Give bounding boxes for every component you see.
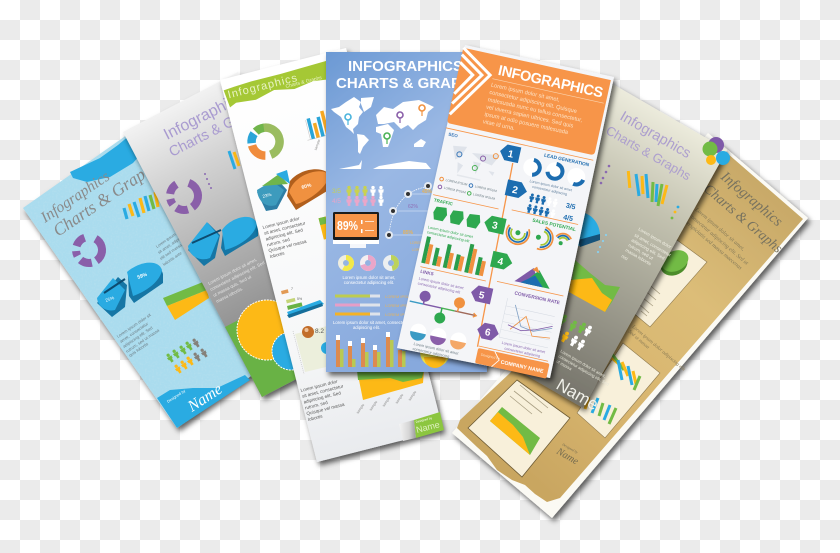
cyan text footer: adipiscing elit. Sed bbox=[122, 325, 154, 349]
bowl icons bbox=[409, 322, 468, 351]
area chart axis labels: sample bbox=[356, 403, 365, 415]
traffic text: consectetur adipiscing elit bbox=[426, 230, 471, 244]
cyan text block: sit amet, adipiscing bbox=[157, 232, 188, 255]
cyan text block bbox=[155, 226, 190, 267]
network arc: 62% bbox=[408, 204, 419, 210]
caption bbox=[342, 275, 396, 285]
step 5: 5 bbox=[478, 290, 486, 302]
area chart axis labels: sample bbox=[369, 400, 378, 412]
links text bbox=[417, 277, 465, 295]
cyan text footer: quis lobortis bbox=[128, 341, 149, 358]
company footer bbox=[475, 348, 550, 379]
header lorem text: consectetur adipiscing elit. Quisque bbox=[489, 90, 577, 115]
green name tag: Name bbox=[415, 419, 441, 435]
white sheet title bbox=[227, 66, 323, 104]
network arc: LOREM bbox=[410, 241, 423, 245]
khaki text footer: consectetur adipiscing elit. Sed bbox=[558, 354, 611, 387]
parchment caption: Lorem ipsum dolor adipiscing elit bbox=[630, 324, 686, 373]
donut trio bbox=[340, 258, 396, 268]
parchment intro text: Lorem ipsum dolor sit amet, bbox=[693, 206, 746, 253]
footer caption: adipiscing elit. bbox=[353, 325, 380, 330]
cyan name credit: Designed by bbox=[166, 389, 186, 404]
cyan text footer: rutrum, sed ut massa bbox=[125, 327, 161, 354]
grey title: Infographics bbox=[161, 89, 246, 144]
line chart bbox=[499, 298, 556, 348]
cyan pie chart bbox=[97, 263, 163, 317]
caption: consectetur adipiscing elit. bbox=[344, 280, 394, 285]
traffic bar chart bbox=[421, 234, 489, 276]
3D pie chart: 23% bbox=[262, 192, 272, 199]
khaki text block: massa lobortis bbox=[624, 248, 653, 267]
parchment note card: area chart bbox=[468, 380, 570, 477]
cyan text footer bbox=[116, 312, 161, 358]
khaki text block: rutrum, sed ut bbox=[628, 243, 655, 261]
conversion rate heading: CONVERSION RATE bbox=[514, 290, 561, 306]
text block upper: sit amet, consectetur bbox=[263, 220, 306, 236]
text block upper bbox=[262, 215, 312, 259]
3D axis labels: sample bbox=[325, 136, 333, 148]
step 1: 1 bbox=[507, 149, 515, 161]
sheet: white infographic with green header bbox=[220, 48, 444, 462]
cyan bars bbox=[124, 192, 158, 219]
traffic text bbox=[426, 225, 474, 244]
white sheet title: Infographics bbox=[227, 72, 299, 101]
horizontal bars bbox=[281, 287, 324, 318]
horizontal bars: 5% bbox=[297, 297, 302, 301]
network arc: 45% bbox=[422, 189, 433, 195]
grey text block: consectetur adipiscing elit. Sed bbox=[209, 260, 266, 292]
network arc: 85% bbox=[403, 230, 414, 236]
mountain chart bbox=[514, 263, 554, 289]
grey legend bbox=[204, 173, 212, 189]
fraction people rows: 3/5 bbox=[565, 202, 576, 211]
map legend: LOREM IPSUM bbox=[474, 184, 497, 193]
text block upper: Lorem ipsum dolor bbox=[262, 216, 301, 230]
area chart bbox=[357, 370, 424, 400]
map legend: LOREM IPSUM bbox=[473, 192, 496, 201]
khaki bar chart bbox=[628, 171, 667, 206]
header lorem text bbox=[482, 83, 586, 146]
3D axis labels: sample bbox=[314, 139, 321, 151]
donut bbox=[242, 118, 289, 165]
timeline arrow bbox=[409, 299, 477, 318]
parchment name credit: Name bbox=[554, 446, 581, 468]
grey text block bbox=[207, 257, 266, 304]
header lorem text: Lorem ipsum dolor sit amet, bbox=[490, 83, 560, 104]
small world map bbox=[447, 144, 500, 184]
fraction row: 3/5 bbox=[332, 186, 384, 196]
timeline pins bbox=[415, 289, 466, 328]
area chart axis labels bbox=[356, 390, 417, 415]
fraction row: 4/5 bbox=[332, 196, 384, 206]
step 2 bbox=[505, 179, 529, 200]
text block lower: Quisque vel massa bbox=[306, 402, 345, 416]
links text: Lorem ipsum dolor sit amet bbox=[418, 277, 465, 291]
fraction people rows: 4/5 bbox=[562, 214, 574, 223]
cyan text block: Lorem ipsum dolor bbox=[155, 226, 186, 249]
khaki name credit: Name bbox=[553, 375, 602, 414]
step 1 bbox=[498, 143, 521, 163]
khaki area chart bbox=[569, 260, 620, 312]
green name tag: Designed by bbox=[415, 416, 433, 424]
khaki text block: sit amet, consectetur bbox=[634, 233, 672, 258]
network arc: LOREM bbox=[412, 248, 425, 252]
traffic hexagons bbox=[432, 205, 482, 229]
khaki legend right bbox=[671, 206, 679, 219]
footer caption: Lorem ipsum dolor sit amet, consectetur bbox=[333, 320, 410, 325]
map legend: LOREM IPSUM bbox=[445, 178, 468, 187]
monitor with 89% bbox=[333, 212, 379, 248]
conversion text: Lorem ipsum dolor sit amet bbox=[501, 341, 546, 354]
progress bars: LOREM IPSUM bbox=[385, 312, 413, 317]
sheet: khaki infographic bbox=[453, 75, 730, 414]
fraction people rows bbox=[526, 193, 576, 223]
text block lower: sit amet, consectetur bbox=[301, 383, 344, 399]
cyan title: Infographics bbox=[37, 168, 113, 227]
parchment title: Infographics bbox=[717, 168, 786, 230]
green torn header bbox=[223, 55, 353, 108]
3D pie chart bbox=[257, 169, 332, 211]
step 6 bbox=[476, 321, 500, 342]
text block lower bbox=[300, 378, 350, 422]
grey title: Charts & Graphs bbox=[167, 97, 270, 161]
links heading: LINKS bbox=[420, 269, 434, 277]
khaki text block: nisi bbox=[620, 254, 629, 261]
text block upper: Quisque vel massa bbox=[268, 239, 307, 253]
traffic text: Lorem ipsum dolor sit amet bbox=[428, 225, 474, 239]
khaki text block bbox=[620, 227, 673, 267]
world map bbox=[331, 97, 434, 169]
khaki text footer: Lorem ipsum dolor sit amet, bbox=[560, 349, 607, 379]
collection of fanned infographic sheets bbox=[23, 45, 808, 518]
step 3 bbox=[483, 214, 507, 235]
cyan footer band bbox=[157, 375, 250, 428]
step 4 bbox=[490, 251, 514, 271]
lead generation text: Lorem ipsum dolor sit amet bbox=[529, 179, 572, 192]
links text: consectetur adipiscing elit bbox=[417, 281, 462, 295]
step 3: 3 bbox=[491, 220, 499, 232]
sheet: cyan textured infographic bbox=[23, 130, 288, 428]
text block lower: adipiscing elit. Sed bbox=[303, 390, 342, 405]
map pins bbox=[345, 105, 425, 144]
map legend bbox=[438, 177, 497, 201]
lead generation text: consectetur adipiscing bbox=[532, 185, 568, 196]
cyan pie chart: 59% bbox=[137, 272, 149, 281]
cyan name credit: Name bbox=[184, 381, 225, 416]
grey bars bbox=[229, 148, 244, 169]
monitor with 89%: 89% bbox=[337, 219, 358, 233]
bubble chart: 8.2 bbox=[315, 328, 324, 335]
parchment name credit: Designed by bbox=[561, 442, 579, 455]
parchment note card: bar charts bbox=[577, 343, 660, 438]
khaki title: Infographics bbox=[617, 109, 693, 162]
text block upper: lobortis bbox=[269, 250, 286, 259]
map legend: LOREM IPSUM bbox=[443, 186, 466, 195]
sheet: parchment infographic bbox=[452, 133, 808, 518]
bowl caption: consectetur adipiscing bbox=[412, 347, 450, 359]
icon: corner circles bbox=[702, 137, 730, 165]
step 6: 6 bbox=[484, 327, 492, 339]
text block upper: rutrum, sed bbox=[266, 237, 291, 247]
cyan text block: lobortis ante bbox=[162, 250, 183, 267]
lead generation heading: LEAD GENERATION bbox=[543, 153, 590, 168]
lead generation gauges bbox=[522, 156, 587, 188]
cyan pie chart: 25% bbox=[105, 295, 115, 303]
text block lower: lobortis bbox=[307, 413, 324, 422]
khaki pie legend bbox=[597, 234, 607, 253]
khaki text block: Lorem ipsum dolor bbox=[638, 227, 673, 250]
company footer: Designed by bbox=[480, 353, 501, 361]
sheet: grey infographic bbox=[123, 72, 377, 397]
step 2: 2 bbox=[511, 185, 519, 197]
SEO heading: SEO bbox=[448, 132, 459, 139]
header lorem text: malesuada nunc eu tellus consectetur, bbox=[487, 97, 583, 124]
area chart axis labels: sample bbox=[395, 393, 404, 405]
cyan torn header bbox=[70, 135, 140, 182]
central timeline bbox=[473, 163, 518, 347]
khaki pie bbox=[578, 212, 600, 247]
text block upper: adipiscing elit. Sed bbox=[265, 227, 304, 242]
blue sheet title bbox=[336, 58, 482, 92]
cyan people icons bbox=[165, 337, 209, 374]
cyan text footer: Lorem ipsum dolor sit bbox=[116, 312, 152, 339]
cyan text block: elit sed massa quis bbox=[159, 238, 190, 261]
page curl bbox=[399, 420, 416, 441]
header title: INFOGRAPHICS bbox=[497, 63, 605, 102]
text block lower: Lorem ipsum dolor bbox=[300, 379, 339, 393]
progress bars bbox=[335, 294, 413, 317]
area chart axis labels: sample bbox=[408, 390, 417, 402]
step 4: 4 bbox=[496, 256, 505, 268]
cyan area chart bbox=[163, 282, 209, 320]
header lorem text: ipsum at odio posuere malesuada bbox=[484, 112, 569, 136]
progress bars: LOREM IPSUM bbox=[385, 294, 413, 299]
green name tag bbox=[414, 412, 444, 438]
area chart axis labels: sample bbox=[382, 396, 391, 408]
khaki legend dots bbox=[600, 165, 610, 184]
traffic heading: TRAFFIC bbox=[433, 198, 454, 207]
fraction row: 3/5: 3/5 bbox=[332, 188, 341, 195]
khaki text footer: ut massa bbox=[556, 359, 573, 372]
sales rainbow charts bbox=[499, 214, 578, 261]
orange header panel bbox=[447, 48, 611, 155]
parchment caption: Sed ut massa bbox=[627, 330, 650, 351]
khaki text block: adipiscing elit. Sed bbox=[630, 238, 666, 261]
grey text block: ut massa quis. Sed ut bbox=[212, 274, 253, 298]
3D bar chart bbox=[301, 103, 358, 140]
caption: Lorem ipsum dolor sit amet, bbox=[342, 275, 396, 280]
cyan donut bbox=[71, 232, 107, 268]
white sheet title: Charts & Graphs bbox=[285, 75, 323, 90]
grey pie chart bbox=[188, 217, 258, 266]
grey footer green panel bbox=[225, 267, 377, 397]
3D axis labels bbox=[311, 132, 347, 152]
parchment intro text: consectetur adipiscing elit. Sed ut bbox=[688, 213, 750, 267]
parchment intro text: perspiciatis sed massa maecenas bbox=[682, 218, 743, 271]
sales potential heading: SALES POTENTIAL bbox=[532, 218, 577, 233]
khaki title: Charts & Graphs bbox=[604, 123, 694, 183]
footer caption bbox=[333, 320, 410, 330]
khaki people icons bbox=[558, 313, 594, 351]
header lorem text: vel viverra sapien ultrices. Sed quis bbox=[485, 105, 574, 130]
bowl caption bbox=[412, 342, 460, 361]
3D axis labels: sample bbox=[337, 133, 345, 145]
cyan title: Charts & Graphs bbox=[49, 155, 162, 240]
blue sheet title: INFOGRAPHICS bbox=[348, 58, 463, 75]
sheet: orange and white infographic bbox=[397, 45, 614, 380]
step 5 bbox=[469, 284, 493, 304]
cyan name credit bbox=[166, 381, 225, 416]
bowl caption: Lorem ipsum dolor sit amet bbox=[413, 342, 460, 356]
cyan text footer: amet, consectetur bbox=[119, 321, 150, 344]
grey donut bbox=[166, 178, 202, 214]
company footer: COMPANY NAME bbox=[500, 360, 544, 375]
hidden chart peek bbox=[420, 352, 450, 368]
network arc bbox=[385, 182, 433, 252]
fraction row: 4/5: 4/5 bbox=[332, 198, 341, 205]
blue circle bbox=[272, 332, 310, 370]
bubble chart bbox=[293, 325, 343, 374]
blue sheet title: CHARTS & GRAPHS bbox=[336, 75, 482, 92]
text block lower: rutrum, sed bbox=[304, 400, 329, 410]
yellow circle bbox=[237, 300, 297, 360]
parchment note card: pie bbox=[600, 240, 707, 327]
conversion text: consectetur adipiscing bbox=[504, 347, 541, 358]
progress bars: LOREM IPSUM bbox=[385, 303, 413, 308]
sheet: blue infographic bbox=[326, 52, 487, 372]
axis and stacked bars bbox=[319, 216, 333, 240]
grey text block: massa lobortis. bbox=[215, 286, 244, 304]
bar chart bbox=[336, 332, 406, 367]
header lorem text: vitae id urna. bbox=[482, 119, 516, 132]
horizontal bars: 7 bbox=[291, 287, 293, 291]
parchment title: Charts & Graphs bbox=[700, 182, 785, 257]
3D pie chart: 60% bbox=[301, 182, 313, 191]
grey text block: Lorem ipsum dolor sit amet, bbox=[207, 257, 258, 286]
chevron icon bbox=[449, 48, 495, 121]
